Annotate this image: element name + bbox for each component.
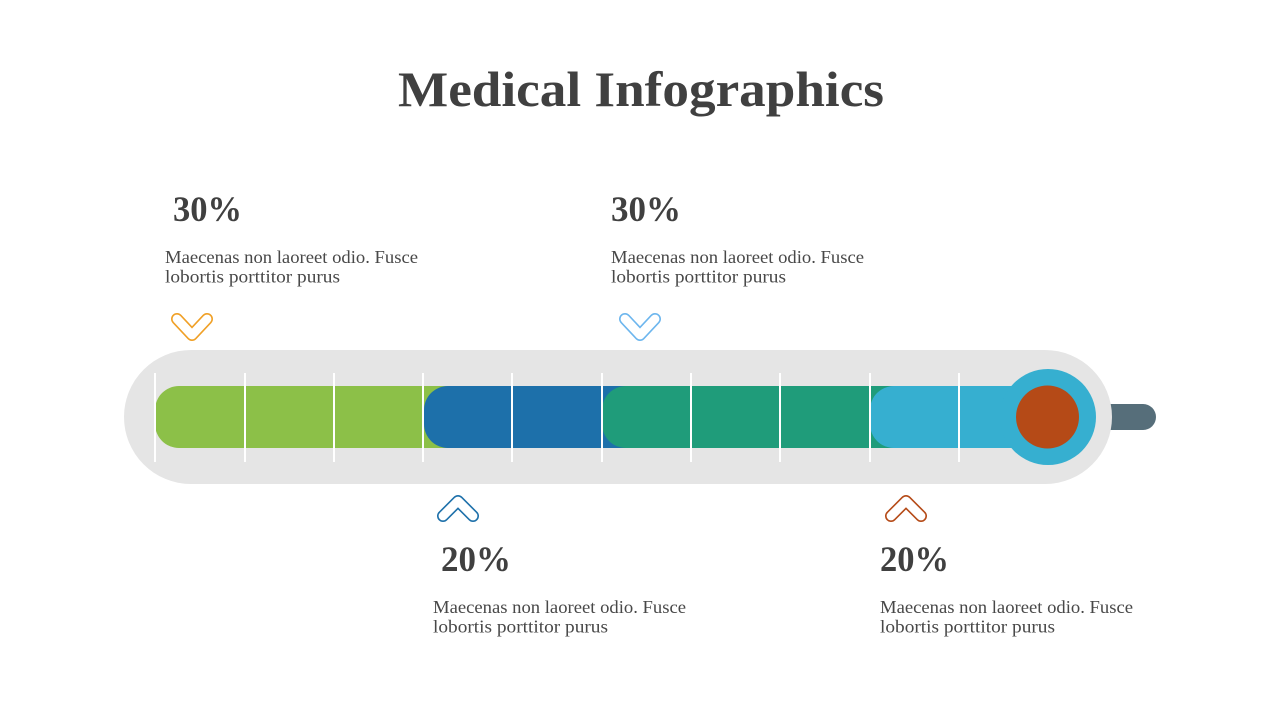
callout: 30% teal <box>611 189 864 335</box>
description: lobortis porttitor purus <box>433 616 608 636</box>
description: Maecenas non laoreet odio. Fusce <box>165 247 418 267</box>
description <box>433 597 686 636</box>
thermometer chart <box>124 350 1156 484</box>
segment: light blue <box>870 386 1050 448</box>
segment: teal <box>602 386 922 448</box>
callout: 20% blue <box>433 501 686 636</box>
segment: blue <box>424 386 654 448</box>
description: Maecenas non laoreet odio. Fusce <box>611 247 864 267</box>
description: Maecenas non laoreet odio. Fusce <box>433 597 686 617</box>
description <box>611 247 864 286</box>
thermometer casing <box>124 350 1112 484</box>
title: Medical Infographics <box>398 61 884 117</box>
percentage: 20% <box>880 539 949 579</box>
percentage: 20% <box>441 539 511 579</box>
scale ticks <box>155 373 959 462</box>
icon: light blue down chevron <box>625 319 655 335</box>
thermometer bulb <box>1000 369 1096 465</box>
bulb core <box>1016 386 1079 448</box>
thermometer stem <box>1100 404 1156 430</box>
percentage: 30% <box>173 189 242 229</box>
callout: 30% green <box>165 189 418 335</box>
icon: rust up chevron <box>891 501 921 516</box>
icon: blue up chevron <box>443 501 473 516</box>
description <box>165 247 418 286</box>
segment: green <box>155 386 475 448</box>
icon: orange down chevron <box>177 319 207 335</box>
description <box>880 597 1133 636</box>
callout: 20% light blue <box>880 501 1133 636</box>
description: lobortis porttitor purus <box>165 266 340 286</box>
description: lobortis porttitor purus <box>880 616 1055 636</box>
description: Maecenas non laoreet odio. Fusce <box>880 597 1133 617</box>
percentage: 30% <box>611 189 681 229</box>
description: lobortis porttitor purus <box>611 266 786 286</box>
